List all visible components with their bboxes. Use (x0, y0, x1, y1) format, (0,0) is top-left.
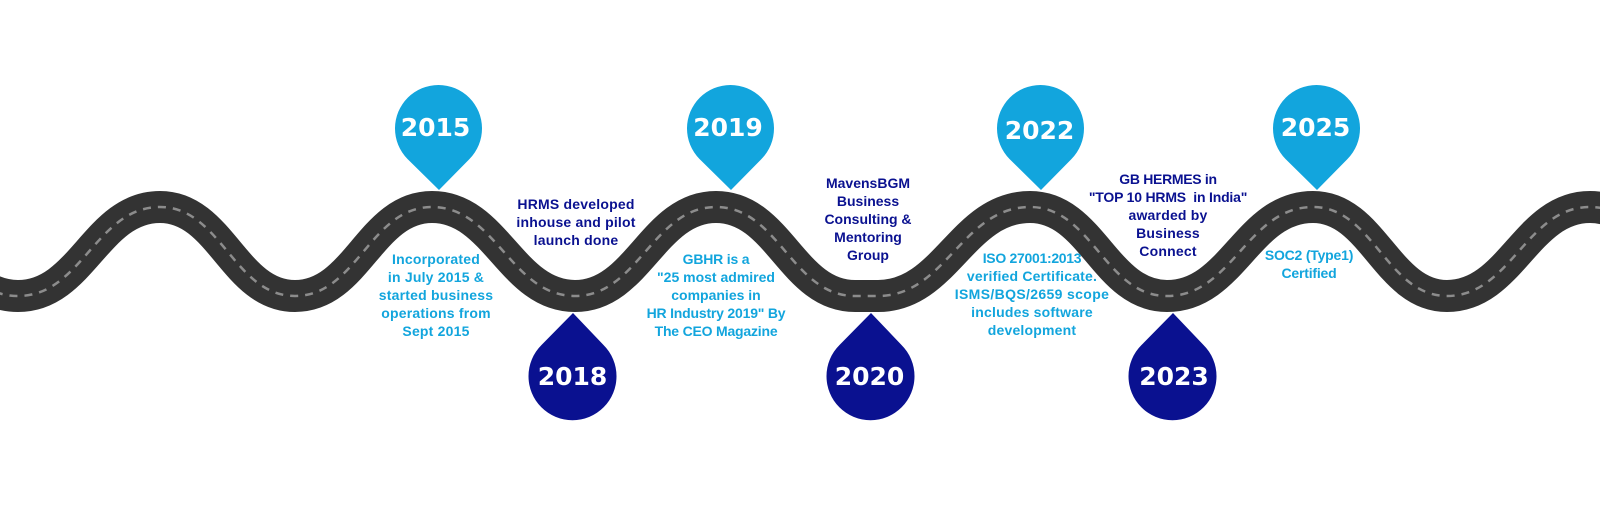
caption: 2018 HRMS pilot: HRMS developed inhouse and pilot launch done (516, 196, 636, 248)
pin: 2018 (528, 313, 616, 420)
pin: 2019: 2019 (693, 113, 763, 142)
caption: 2022 ISO certificate: ISO 27001:2013 verified Certificate. ISMS/BQS/2659 scope includes software development (955, 250, 1109, 338)
pin: 2018: 2018 (538, 362, 607, 391)
pin: 2022: 2022 (1005, 116, 1074, 145)
pin: 2019 (687, 85, 774, 190)
pin: 2020: 2020 (835, 362, 904, 391)
pin: 2025: 2025 (1281, 113, 1350, 142)
pin: 2020 (827, 313, 914, 420)
pin: 2015 (395, 85, 482, 190)
caption: 2023 GB HERMES award: GB HERMES in "TOP 10 HRMS in India" awarded by Business Connect (1089, 171, 1247, 259)
pin: 2022 (997, 85, 1084, 190)
pin: 2023 (1129, 313, 1216, 420)
pin: 2025 (1273, 85, 1360, 190)
caption: 2025 SOC2: SOC2 (Type1) Certified (1265, 247, 1353, 281)
caption: 2020 MavensBGM: MavensBGM Business Consulting & Mentoring Group (824, 175, 912, 263)
caption: 2019 admired companies: GBHR is a "25 most admired companies in HR Industry 2019" By The CEO Magazine (647, 251, 785, 339)
winding road (0, 207, 1600, 296)
caption: 2015 incorporation: Incorporated in July 2015 & started business operations from Sept 2015 (379, 251, 493, 339)
pin: 2023: 2023 (1139, 362, 1209, 391)
pin: 2015: 2015 (401, 113, 470, 142)
